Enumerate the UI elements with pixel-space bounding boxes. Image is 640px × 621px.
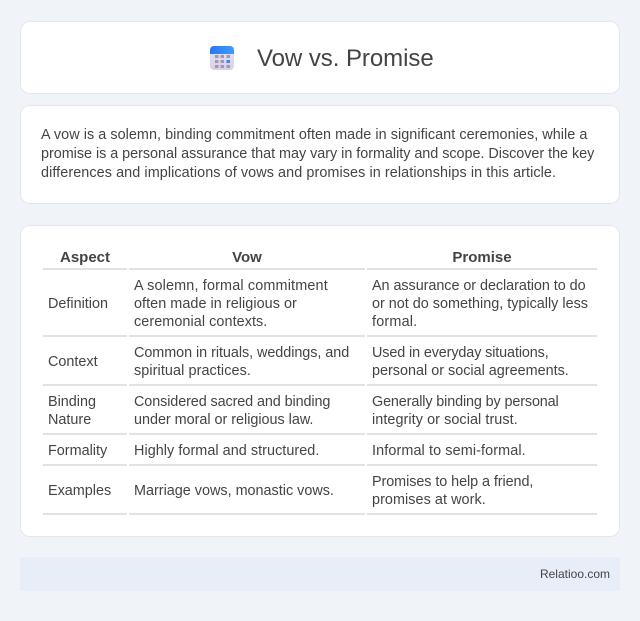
text: introduction [41, 127, 594, 181]
row: examples: Promises to help a friend, [372, 474, 533, 490]
row: definition: ceremonial contexts. [134, 314, 267, 330]
icon: calendar [210, 46, 234, 70]
row: binding nature: integrity or social trust. [372, 412, 518, 428]
row: definition: A solemn, formal commitment [134, 278, 328, 294]
row: definition: formal. [372, 314, 417, 330]
text: introduction: A vow is a solemn, binding commitment often made in significant ceremonies, while a [41, 127, 587, 143]
row: examples: promises at work. [372, 492, 486, 508]
row: definition: or not do something, typically less [372, 296, 588, 312]
row: binding nature: Binding [48, 394, 96, 410]
row: definition: An assurance or declaration to do [372, 278, 586, 294]
footer [20, 557, 620, 591]
row: formality: Highly formal and structured. [134, 443, 319, 459]
row: formality: Formality [48, 443, 107, 459]
row: formality [48, 443, 526, 459]
row: binding nature: Considered sacred and binding [134, 394, 330, 410]
row: context: Used in everyday situations, [372, 345, 549, 361]
row: examples [48, 474, 533, 508]
table header: Vow [232, 249, 262, 266]
row: binding nature: under moral or religious law. [134, 412, 313, 428]
row: definition: often made in religious or [134, 296, 297, 312]
panel: introduction [20, 105, 620, 204]
row: examples: Examples [48, 483, 111, 499]
footer credit: Relatioo.com [540, 567, 610, 581]
row: definition [48, 278, 588, 330]
row: binding nature [48, 394, 559, 428]
row: binding nature: Nature [48, 412, 91, 428]
row: examples: Marriage vows, monastic vows. [134, 483, 334, 499]
title: Vow vs. Promise [257, 45, 434, 72]
row: context: Context [48, 354, 98, 370]
row: formality: Informal to semi-formal. [372, 443, 526, 459]
row: context [48, 345, 569, 379]
table header: Promise [452, 249, 512, 266]
row: context: spiritual practices. [134, 363, 251, 379]
table header: Aspect [60, 249, 110, 266]
panel: header [20, 21, 620, 94]
row: context: Common in rituals, weddings, and [134, 345, 349, 361]
text: introduction: promise is a personal assurance that may vary in formality and scope. Discover the key [41, 146, 594, 162]
text: introduction: differences and implications of vows and promises in relationships in this article. [41, 165, 556, 181]
row: binding nature: Generally binding by personal [372, 394, 559, 410]
table header [60, 249, 512, 266]
row: definition: Definition [48, 296, 108, 312]
row: context: personal or social agreements. [372, 363, 569, 379]
panel: comparison table [20, 225, 620, 537]
